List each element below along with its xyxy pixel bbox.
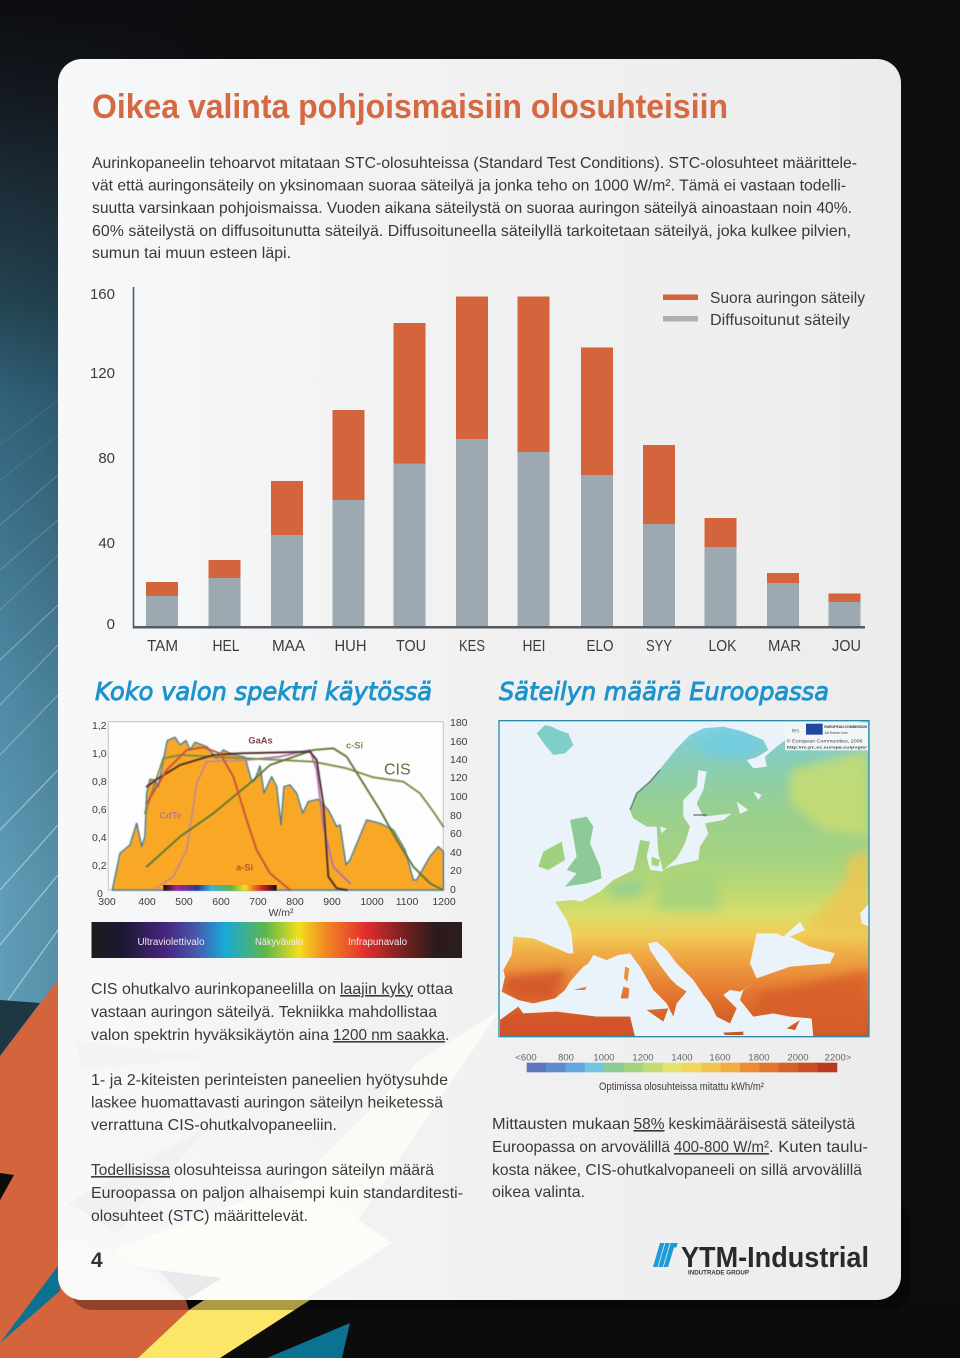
left text block: vastaan auringon säteilyä. Tekniikka mahdollistaa: [91, 1004, 437, 1021]
y axis labels: 120: [90, 365, 115, 382]
map credit box: © European Communities, 2006: [787, 738, 863, 743]
month labels: TAM: [147, 638, 178, 655]
month labels: LOK: [708, 638, 737, 655]
left text block: 1- ja 2-kiteisten perinteisten paneelien hyötysuhde: [91, 1072, 448, 1089]
map colour scale: 2000: [787, 1052, 809, 1064]
spectrum axis labels: 180: [450, 717, 468, 729]
map credit box: ies: [792, 729, 799, 735]
right text block: kosta näkee, CIS-ohutkalvopaneeli on sillä arvovälillä: [492, 1162, 862, 1179]
spectrum axis labels: 0: [97, 888, 103, 900]
spectrum axis labels: 1,0: [92, 748, 107, 760]
spectrum axis labels: 0: [450, 884, 456, 896]
month labels: HEL: [212, 638, 240, 655]
intro text block: [92, 155, 857, 262]
logo: YTM-Industrial: YTM-Industrial: [681, 1242, 869, 1274]
left text block: .: [445, 1027, 449, 1044]
spectrum chart: 1200: [432, 896, 456, 908]
logo icon: [653, 1243, 678, 1267]
spectrum axis labels: 20: [450, 865, 462, 877]
month labels: MAR: [768, 638, 801, 655]
spectrum colour band: Infrapunavalo: [348, 936, 407, 948]
map credit box: http://re.jrc.ec.europa.eu/pvgis/: [787, 745, 868, 750]
intro text block: sumun tai muun esteen läpi.: [92, 245, 291, 262]
spectrum chart: 600: [212, 896, 230, 908]
right text block: [492, 1116, 868, 1201]
month labels: SYY: [646, 638, 672, 655]
right text block: keskimääräisestä säteilystä: [668, 1116, 855, 1133]
enclosed seas and lakes: [660, 770, 869, 978]
left text block: Todellisissa: [91, 1162, 170, 1179]
spectrum axis labels: 1,2: [92, 720, 107, 732]
card shadow: [70, 1200, 910, 1310]
left text block: olosuhteet (STC) määrittelevät.: [91, 1208, 308, 1225]
page number: 4: [91, 1249, 103, 1272]
legend: Diffusoitunut säteily: [710, 312, 850, 329]
spectrum axis labels: 0,6: [92, 804, 107, 816]
spectrum colour band: Ultraviolettivalo: [138, 936, 205, 948]
left text block: laskee huomattavasti auringon säteilyn heiketessä: [91, 1094, 443, 1112]
right text block: oikea valinta.: [492, 1184, 585, 1201]
spectrum chart: a-Si: [236, 862, 253, 872]
direct radiation bars: [146, 296, 860, 602]
spectrum chart: 700: [249, 896, 267, 908]
month labels: [147, 638, 861, 655]
month labels: HUH: [334, 638, 366, 655]
land masses: [500, 720, 869, 1037]
map colour scale: 2200>: [825, 1052, 852, 1064]
right text block: 58%: [634, 1116, 664, 1133]
right text block: Mittausten mukaan: [492, 1116, 630, 1133]
efficiency curves: [145, 747, 443, 890]
y axis labels: [90, 286, 115, 633]
spectrum chart: W/m²: [268, 907, 294, 919]
heading: Europe map: Säteilyn määrä Euroopassa: [499, 677, 829, 706]
spectrum chart: 1000: [360, 896, 384, 908]
right text block: Euroopassa on arvovälillä: [492, 1139, 670, 1156]
logo: YTM-Industrial: INDUTRADE GROUP: [688, 1270, 750, 1276]
spectrum colour band: [92, 922, 462, 958]
spectrum chart: 1100: [396, 896, 418, 908]
left text block: [91, 981, 463, 1225]
spectrum axis labels: 140: [450, 754, 468, 766]
bar chart: monthly radiation: [90, 286, 865, 655]
intro text block: 60% säteilystä on diffusoitunutta säteilyä. Diffusoituneella säteilyllä tarkoitetaan säteilyä, joka kulkee pilvien,: [92, 223, 851, 240]
spectrum axis labels: 80: [450, 810, 462, 822]
spectrum axis labels: 120: [450, 772, 468, 784]
right text block: 400-800 W/m²: [674, 1139, 770, 1156]
intro text block: vät että auringonsäteily on yksinomaan suoraa säteilyä ja jonka teho on 1000 W/m². Tämä ei vastaan todelli-: [92, 178, 846, 194]
spectrum axis labels: 0,8: [92, 776, 107, 788]
map colour scale: 1400: [671, 1052, 693, 1064]
map colour scale: 1000: [593, 1052, 615, 1064]
spectrum chart: GaAs: [248, 735, 273, 745]
left text block: verrattuna CIS-ohutkalvopaneeliin.: [91, 1117, 337, 1134]
month labels: JOU: [832, 638, 861, 655]
spectrum axis labels: 40: [450, 847, 462, 859]
spectrum axis labels: [92, 717, 468, 900]
map colour scale: Optimissa olosuhteissa mitattu kWh/m²: [599, 1081, 764, 1093]
Europe map: [499, 720, 869, 1037]
spectrum axis labels: 60: [450, 828, 462, 840]
left text block: valon spektrin hyväksikäytön aina: [91, 1027, 329, 1044]
map colour scale: 1600: [709, 1052, 731, 1064]
y axis labels: 160: [90, 286, 115, 303]
left text block: laajin kyky: [340, 981, 413, 998]
spectrum chart: 300: [98, 896, 116, 908]
map credit box: EUROPEAN COMMISSION: [824, 725, 867, 729]
spectrum chart: 400: [138, 896, 156, 908]
spectrum colour band: Näkyvävalo: [255, 936, 303, 948]
map colour scale: [515, 1052, 852, 1093]
spectrum chart: 800: [286, 896, 304, 908]
intro text block: Aurinkopaneelin tehoarvot mitataan STC-olosuhteissa (Standard Test Conditions). STC-olosuhteet määrittele-: [92, 155, 857, 172]
map colour scale: 800: [558, 1052, 574, 1064]
y axis labels: 0: [107, 616, 115, 633]
left text block: ottaa: [417, 981, 453, 998]
heading: spectrum: Koko valon spektri käytössä: [95, 677, 432, 706]
spectrum chart: 900: [323, 896, 341, 908]
month labels: TOU: [396, 638, 426, 655]
month labels: MAA: [272, 638, 306, 655]
spectrum chart: c-Si: [346, 741, 363, 751]
spectrum chart: 500: [175, 896, 193, 908]
left text block: Euroopassa on paljon alhaisempi kuin standarditesti-: [91, 1185, 463, 1202]
map colour scale: <600: [515, 1052, 537, 1064]
regional radiation overlays: [500, 732, 869, 1037]
spectrum axis labels: 100: [450, 791, 468, 803]
y axis labels: 40: [98, 535, 115, 552]
spectrum axis labels: 0,4: [92, 832, 107, 844]
spectrum chart: [92, 717, 468, 919]
map credit box: [785, 722, 868, 750]
legend: [663, 290, 865, 329]
spectrum chart: CdTe: [159, 810, 182, 820]
spectrum axis labels: 0,2: [92, 860, 107, 872]
month labels: KES: [459, 638, 485, 655]
map colour scale: 1800: [748, 1052, 770, 1064]
right text block: . Kuten taulu-: [769, 1139, 868, 1156]
left text block: olosuhteissa auringon säteilyn määrä: [174, 1162, 434, 1179]
left text block: 1200 nm saakka: [333, 1027, 445, 1044]
month labels: ELO: [586, 638, 614, 655]
y axis labels: 80: [98, 450, 115, 467]
intro text block: suutta varsinkaan pohjoismaissa. Vuoden aikana säteilystä on suoraa auringon säteilyä ainoastaan noin 40%.: [92, 200, 852, 217]
map colour scale: 1200: [632, 1052, 654, 1064]
title: Oikea valinta pohjoismaisiin olosuhteisiin: [92, 88, 728, 126]
diffuse radiation bars: [146, 439, 860, 626]
spectrum chart: CIS: [384, 762, 411, 779]
spectrum axis labels: 160: [450, 736, 468, 748]
legend: Suora auringon säteily: [710, 290, 865, 307]
month labels: HEI: [522, 638, 546, 655]
solar spectrum area: [112, 737, 443, 890]
left text block: CIS ohutkalvo aurinkopaneelilla on: [91, 981, 336, 998]
map credit box: Joint Research Centre: [824, 731, 848, 735]
